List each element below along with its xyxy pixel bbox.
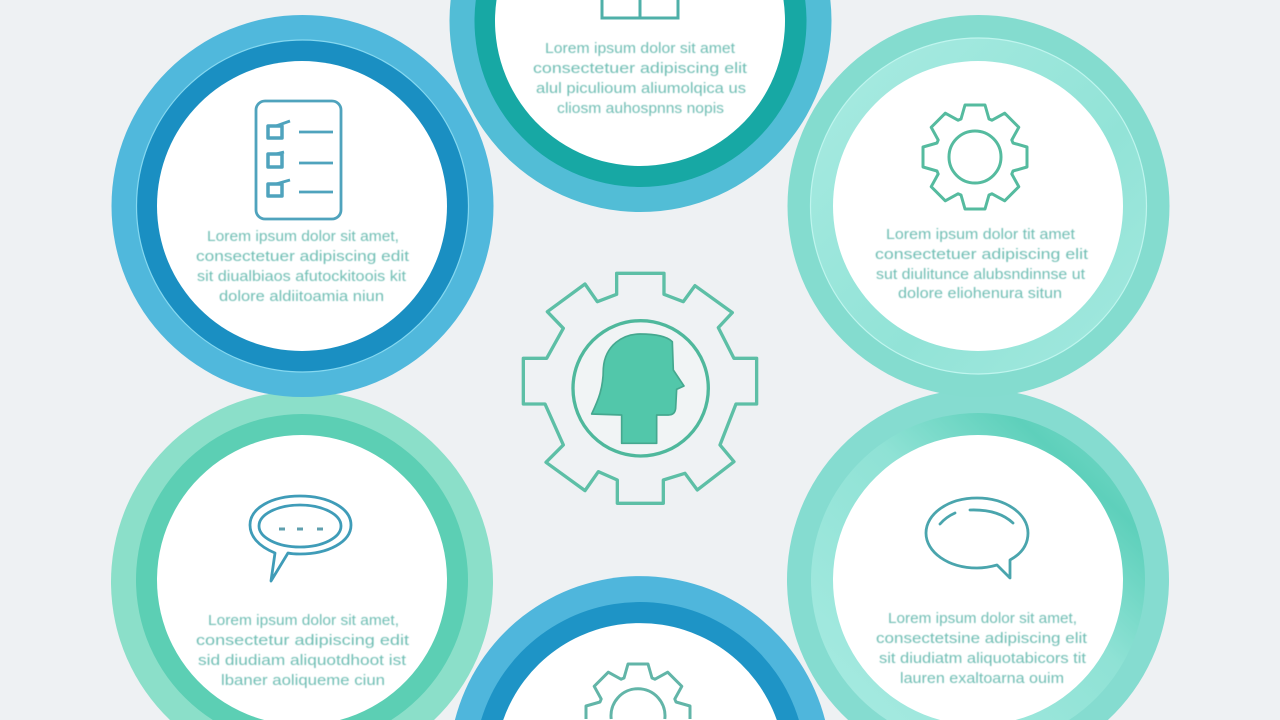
ring: top left outer <box>112 15 494 397</box>
disc: bottom centre white <box>503 623 777 720</box>
ring: top left inner <box>136 40 468 372</box>
text: top left body: consectetuer adipiscing edit <box>196 248 410 265</box>
disc: bottom left white <box>157 435 447 720</box>
icon: plain speech bubble <box>926 498 1028 578</box>
icon: small gear bottom centre <box>586 664 690 719</box>
panel: bottom centre gear <box>455 576 825 720</box>
icon: gear <box>923 105 1027 209</box>
text: top centre body: cliosm auhospnns nopis <box>557 100 724 117</box>
text: bottom right body: lauren exaltoarna ouim <box>900 670 1064 687</box>
disc: top centre white <box>495 0 785 166</box>
ring: bottom left outer <box>111 391 493 720</box>
text: bottom right body: consectetsine adipiscing elit <box>876 630 1088 647</box>
text: top right body: sut diulitunce alubsndinnse ut <box>876 266 1086 283</box>
text: bottom right body: Lorem ipsum dolor sit amet, <box>888 610 1077 627</box>
text: top left body: sit diualbiaos afutockitoois kit <box>197 268 407 285</box>
text: top right body: Lorem ipsum dolor tit amet <box>886 226 1076 243</box>
panel: bottom right speech bubble <box>787 389 1169 720</box>
text: bottom left body <box>196 612 410 689</box>
text: bottom left body: consectetur adipiscing edit <box>196 632 410 649</box>
text: top left body <box>196 228 410 305</box>
text: bottom left body: sid diudiam aliquotdhoot ist <box>198 652 407 669</box>
disc: bottom right white <box>833 435 1123 720</box>
text: bottom left body: Lorem ipsum dolor sit amet, <box>208 612 399 629</box>
text: top right body: dolore eliohenura situn <box>898 285 1062 302</box>
ring: bottom right outer <box>787 389 1169 720</box>
text: top left body: dolore aldiitoamia niun <box>219 288 384 305</box>
text: top centre body: Lorem ipsum dolor sit amet <box>545 40 736 57</box>
panel: bottom left speech bubble <box>111 391 493 720</box>
text: top centre body: consectetuer adipiscing elit <box>533 60 748 77</box>
head silhouette <box>592 334 684 443</box>
ring: top centre outer <box>450 0 832 212</box>
text: bottom right body: sit diudiatm aliquotabicors tit <box>879 650 1087 667</box>
panel: top centre <box>450 0 832 212</box>
ring: bottom centre inner <box>481 602 799 720</box>
icon: checklist <box>256 101 341 219</box>
text: top right body <box>875 226 1089 302</box>
ring: top centre inner <box>474 0 806 187</box>
text: top centre body: alul piculioum aliumolqica us <box>536 80 746 97</box>
panel: top left checklist <box>112 15 494 397</box>
ring: top right outer <box>788 15 1170 397</box>
ring: top right inner <box>810 38 1146 374</box>
central gear with head <box>523 273 757 503</box>
disc: top right white <box>833 61 1123 351</box>
ring: bottom right inner <box>811 413 1145 720</box>
ring: bottom centre outer <box>455 576 825 720</box>
icon: book cropped at top <box>602 0 678 18</box>
text: bottom left body: lbaner aoliqueme ciun <box>221 672 385 689</box>
text: top left body: Lorem ipsum dolor sit amet, <box>207 228 399 245</box>
disc: top left white <box>157 61 447 351</box>
gear outline <box>523 273 757 503</box>
gear hub circle <box>573 321 708 456</box>
panel: top right gear <box>788 15 1170 397</box>
text: bottom right body <box>876 610 1088 687</box>
text: top centre body <box>533 40 748 117</box>
icon: speech bubble with dots <box>250 496 351 581</box>
text: top right body: consectetuer adipiscing elit <box>875 246 1089 263</box>
ring: bottom left inner <box>136 414 468 720</box>
